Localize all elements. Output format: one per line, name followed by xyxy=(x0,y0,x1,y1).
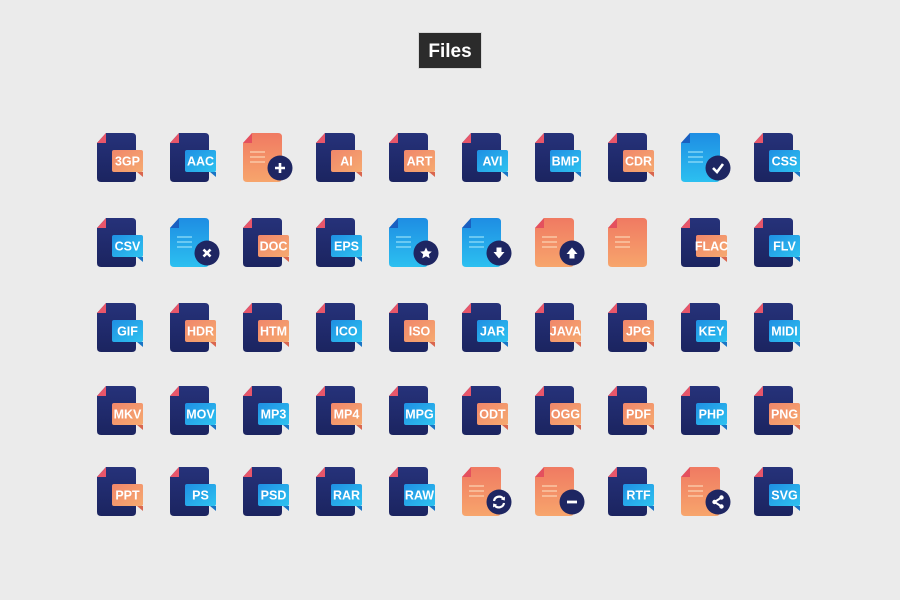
icon: PSD xyxy=(243,467,289,516)
icon: KEY: KEY xyxy=(699,324,725,338)
row 2 xyxy=(97,218,800,267)
icon: AVI xyxy=(462,133,508,182)
icon: PHP xyxy=(681,386,727,435)
title xyxy=(418,32,482,69)
icon: HTM xyxy=(243,303,289,352)
icon: ICO: ICO xyxy=(335,324,358,338)
icon: FLV: FLV xyxy=(773,240,796,254)
title: Files xyxy=(428,41,472,62)
row 4 xyxy=(97,386,800,435)
icon: blank file xyxy=(608,218,647,267)
icon: upload file xyxy=(535,218,584,267)
icon: AVI: AVI xyxy=(483,154,502,168)
icon: 3GP xyxy=(97,133,143,182)
row 5 xyxy=(97,467,800,516)
icon: HDR xyxy=(170,303,216,352)
icon: MPG: MPG xyxy=(405,408,434,422)
icon: AAC xyxy=(170,133,216,182)
icon: PSD: PSD xyxy=(261,488,286,502)
icon: JAR xyxy=(462,303,508,352)
icon: MP4: MP4 xyxy=(334,408,359,422)
icon: PDF xyxy=(608,386,654,435)
icon: GIF: GIF xyxy=(117,324,138,338)
icon: PHP: PHP xyxy=(699,408,724,422)
icon: CDR: CDR xyxy=(625,154,652,168)
icon: star file xyxy=(389,218,438,267)
icon: MKV xyxy=(97,386,143,435)
icon: MOV xyxy=(170,386,216,435)
icon: GIF xyxy=(97,303,143,352)
icon: CDR xyxy=(608,133,654,182)
icon: PS xyxy=(170,467,216,516)
icon: BMP xyxy=(535,133,581,182)
icon: delete file xyxy=(170,218,220,267)
icon: BMP: BMP xyxy=(552,154,579,168)
icon: ICO xyxy=(316,303,362,352)
icon: RAR: RAR xyxy=(333,488,360,502)
icon: HDR: HDR xyxy=(187,324,214,338)
icon: ODT xyxy=(462,386,508,435)
icon: OGG xyxy=(535,386,581,435)
icon: ART: ART xyxy=(407,154,433,168)
icon: ISO xyxy=(389,303,435,352)
row 1 xyxy=(97,133,800,182)
icon: download file xyxy=(462,218,512,267)
icon: MKV: MKV xyxy=(114,408,142,422)
icon: share file xyxy=(681,467,730,516)
icon: FLAC: FLAC xyxy=(695,240,728,254)
icon: sync file xyxy=(462,467,512,516)
icon: RAR xyxy=(316,467,362,516)
icon: FLAC xyxy=(681,218,728,267)
icon: KEY xyxy=(681,303,727,352)
icon: MIDI: MIDI xyxy=(771,324,798,338)
icon: CSS: CSS xyxy=(772,154,797,168)
icon: DOC: DOC xyxy=(260,240,287,254)
icon: remove file xyxy=(535,467,584,516)
icon: SVG xyxy=(754,467,800,516)
icon: AI: AI xyxy=(340,154,353,168)
icon: HTM: HTM xyxy=(260,324,287,338)
icon: OGG: OGG xyxy=(551,408,580,422)
icon: PDF: PDF xyxy=(626,408,651,422)
icon: FLV xyxy=(754,218,800,267)
icon: RAW: RAW xyxy=(405,488,434,502)
icon: add file xyxy=(243,133,292,182)
icon: JAR: JAR xyxy=(480,324,505,338)
icon: JPG: JPG xyxy=(626,324,651,338)
icon: RTF: RTF xyxy=(626,488,651,502)
icon: PNG xyxy=(754,386,800,435)
icon: EPS: EPS xyxy=(334,240,359,254)
icon: SVG: SVG xyxy=(771,488,798,502)
icon: RAW xyxy=(389,467,435,516)
icon: CSV: CSV xyxy=(115,240,141,254)
icon: MOV: MOV xyxy=(186,408,215,422)
icon: ART xyxy=(389,133,435,182)
icon: PS: PS xyxy=(192,488,209,502)
icon: MIDI xyxy=(754,303,800,352)
icon: check file xyxy=(681,133,730,182)
icon: EPS xyxy=(316,218,362,267)
icon: JAVA: JAVA xyxy=(550,324,581,338)
icon: MPG xyxy=(389,386,435,435)
icon: PPT: PPT xyxy=(115,488,140,502)
icon: RTF xyxy=(608,467,654,516)
icon: JAVA xyxy=(535,303,581,352)
icon: 3GP: 3GP xyxy=(115,154,140,168)
icon: DOC xyxy=(243,218,289,267)
icon: PNG: PNG xyxy=(771,408,798,422)
icon: JPG xyxy=(608,303,654,352)
icon: ODT: ODT xyxy=(479,408,506,422)
row 3 xyxy=(97,303,800,352)
icon: MP4 xyxy=(316,386,362,435)
icon: CSS xyxy=(754,133,800,182)
icon: MP3: MP3 xyxy=(261,408,286,422)
icon: CSV xyxy=(97,218,143,267)
icon: AI xyxy=(316,133,362,182)
icon: ISO: ISO xyxy=(409,324,431,338)
icon: AAC: AAC xyxy=(187,154,214,168)
icon: PPT xyxy=(97,467,143,516)
icon: MP3 xyxy=(243,386,289,435)
